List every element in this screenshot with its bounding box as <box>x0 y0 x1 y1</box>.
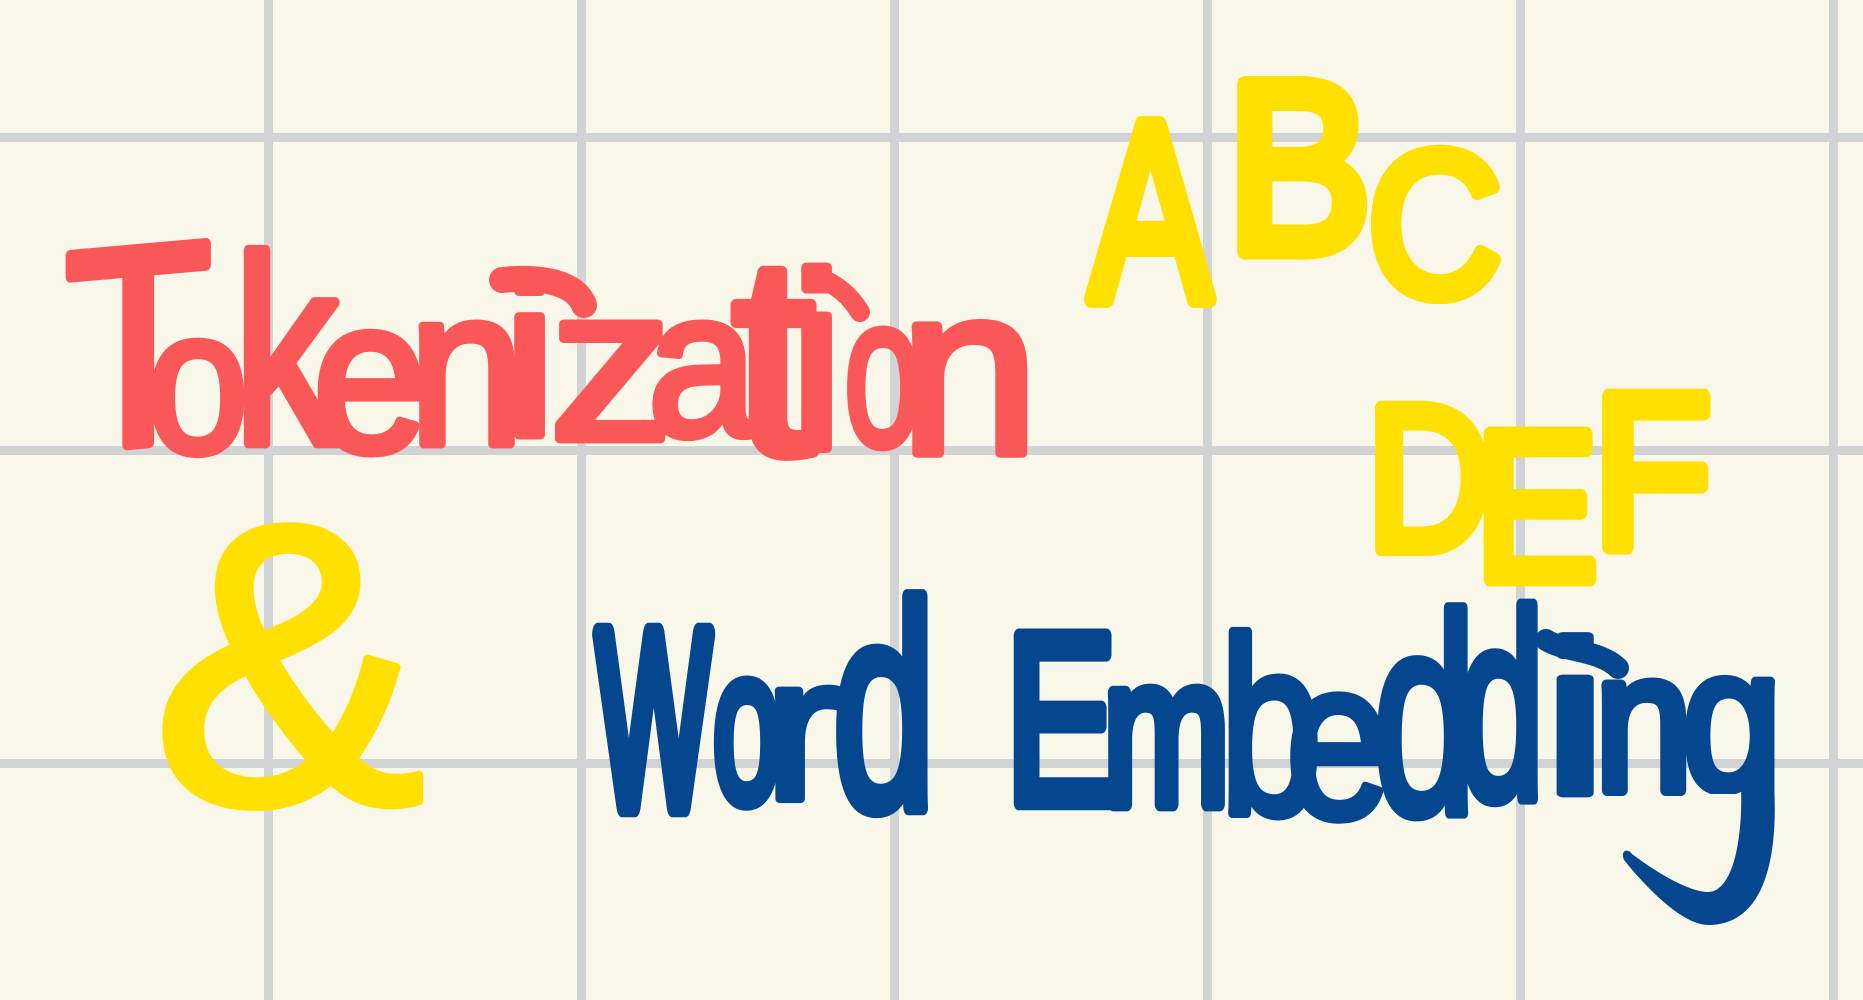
heading: Word Embedding: e <box>1286 613 1391 865</box>
heading: Tokenization: o <box>147 268 248 496</box>
heading: Word Embedding: o <box>713 603 781 848</box>
decorative letters: ABC: A <box>1090 70 1211 353</box>
heading: Tokenization: T <box>65 182 212 510</box>
decorative letters: DEF: E <box>1475 388 1598 624</box>
heading: Tokenization <box>65 182 1038 513</box>
heading: Word Embedding: n <box>1595 611 1692 832</box>
ampersand: & <box>152 441 425 888</box>
heading: Tokenization: i <box>503 233 556 483</box>
decorative letters: DEF: F <box>1593 349 1711 594</box>
decorative letters: ABC: C <box>1368 110 1502 339</box>
heading: Tokenization: n <box>409 242 524 492</box>
heading: Word Embedding: m <box>1103 614 1230 849</box>
heading: Tokenization: k <box>234 202 338 500</box>
heading: Word Embedding: E <box>1005 584 1117 855</box>
heading: Tokenization: z <box>550 243 672 486</box>
decorative letters: ABC <box>1090 32 1502 353</box>
heading: Tokenization: a <box>648 248 758 479</box>
heading: Tokenization: o <box>844 253 921 491</box>
heading: Word Embedding: d <box>1458 559 1544 855</box>
heading: Word Embedding <box>592 589 1775 925</box>
decorative letters: ABC: B <box>1227 32 1371 303</box>
decorative letters: DEF <box>1367 349 1711 624</box>
heading: Word Embedding: W <box>597 579 710 860</box>
heading: Word Embedding: d <box>1373 557 1476 873</box>
heading: Tokenization: n <box>900 236 1038 504</box>
heading: Tokenization: e <box>313 254 428 498</box>
heading: Word Embedding: g <box>1682 604 1782 834</box>
heading: Word Embedding: d <box>833 544 935 870</box>
heading: Word Embedding: b <box>1220 588 1322 867</box>
heading: Tokenization: t <box>732 199 816 513</box>
heading: Tokenization: i <box>790 223 843 501</box>
heading: Word Embedding: r <box>764 614 841 843</box>
heading: Word Embedding: i <box>1543 599 1607 839</box>
decorative letters: DEF: D <box>1367 365 1491 593</box>
